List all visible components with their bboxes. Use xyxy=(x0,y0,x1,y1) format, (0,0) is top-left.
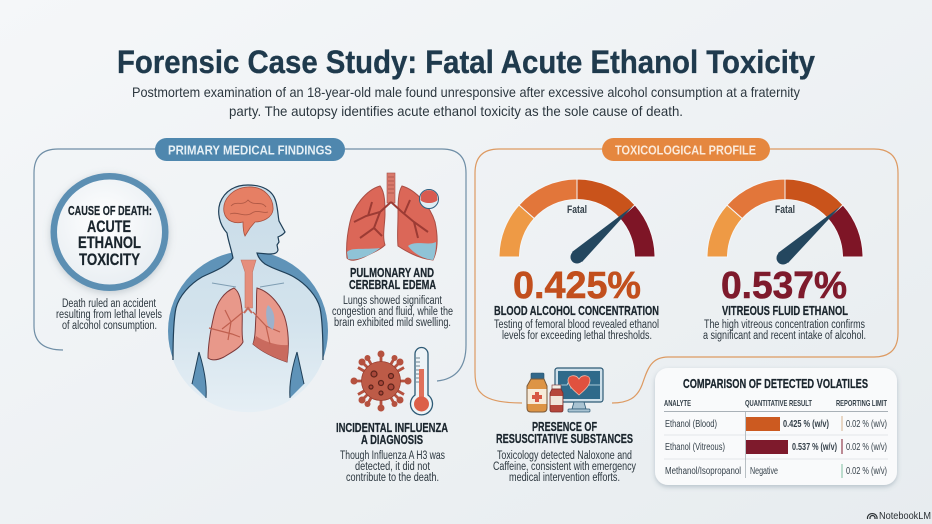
cause of death description: of alcohol consumption. xyxy=(62,320,157,332)
table row: methanol isopropanol: Negative xyxy=(750,466,778,477)
pulmonary edema text: Lungs showed significant xyxy=(343,295,443,307)
blood alcohol figures and text xyxy=(494,265,659,342)
body outline xyxy=(173,185,323,360)
arm gap shadows xyxy=(192,352,304,398)
panel: primary medical findings xyxy=(34,138,466,484)
vitreous fluid figures and text: VITREOUS FLUID ETHANOL xyxy=(722,303,848,318)
cause of death description: Death ruled an accident xyxy=(62,298,157,310)
resuscitative substances text: Caffeine, consistent with emergency xyxy=(493,461,636,473)
subtitle: party. The autopsy identifies acute ethanol toxicity as the sole cause of death. xyxy=(229,103,683,119)
subtitle xyxy=(132,84,800,119)
heading: toxicological profile xyxy=(602,138,770,161)
heading: primary medical findings xyxy=(155,138,345,161)
human body illustration xyxy=(168,185,328,412)
table row: ethanol blood: 0.02 % (w/v) xyxy=(846,419,887,430)
virus icon xyxy=(350,350,412,412)
table column headers xyxy=(664,398,888,408)
table row: methanol isopropanol xyxy=(665,464,887,478)
body fill xyxy=(173,185,323,412)
table column headers: REPORTING LIMIT xyxy=(836,398,888,408)
cause of death badge: TOXICITY xyxy=(79,251,140,269)
vitreous fluid figures and text: 0.537% xyxy=(721,265,847,307)
resuscitative substances text: Toxicology detected Naloxone and xyxy=(497,450,632,462)
gauge: vitreous fluid: Fatal xyxy=(775,204,795,216)
title: Forensic Case Study: Fatal Acute Ethanol Toxicity xyxy=(117,44,815,80)
table column headers: ANALYTE xyxy=(664,398,691,408)
resuscitative substances text: medical intervention efforts. xyxy=(509,472,620,484)
table column headers: QUANTITATIVE RESULT xyxy=(745,398,813,408)
influenza text: Though Influenza A H3 was xyxy=(340,450,445,462)
comparison table card xyxy=(655,368,897,485)
gauge: blood alcohol xyxy=(499,179,655,264)
blood alcohol figures and text: BLOOD ALCOHOL CONCENTRATION xyxy=(494,303,659,318)
pulmonary edema text xyxy=(332,265,453,329)
blood alcohol figures and text: Testing of femoral blood revealed ethanol xyxy=(494,319,659,331)
blood alcohol figures and text: levels for exceeding lethal thresholds. xyxy=(502,330,652,342)
resuscitative substances text xyxy=(493,419,636,484)
pulmonary edema text: CEREBRAL EDEMA xyxy=(349,277,436,292)
table row: ethanol blood xyxy=(665,416,887,431)
icon: medicine bottles and heart monitor xyxy=(527,368,603,412)
gauge: vitreous fluid xyxy=(707,179,863,264)
resuscitative substances text: PRESENCE OF xyxy=(532,419,597,434)
pulmonary edema text: brain exhibited mild swelling. xyxy=(334,317,451,329)
cause of death badge xyxy=(50,173,168,291)
heading: primary medical findings: PRIMARY MEDICAL FINDINGS xyxy=(168,142,332,158)
influenza text: contribute to the death. xyxy=(346,472,439,484)
influenza text: detected, it did not xyxy=(355,461,431,473)
pulmonary edema text: PULMONARY AND xyxy=(350,265,434,280)
cause of death badge: ACUTE xyxy=(87,218,131,236)
figure brain xyxy=(224,187,273,236)
vitreous fluid figures and text xyxy=(703,265,866,342)
cause of death badge: CAUSE OF DEATH: xyxy=(68,203,152,218)
resuscitative substances text: RESUSCITATIVE SUBSTANCES xyxy=(496,431,633,446)
table row: ethanol vitreous: 0.02 % (w/v) xyxy=(846,442,887,453)
panel: toxicological profile xyxy=(475,138,898,484)
table row: ethanol blood: 0.425 % (w/v) xyxy=(783,419,829,430)
gauge: blood alcohol: Fatal xyxy=(567,204,587,216)
thermometer icon xyxy=(411,348,433,415)
pulmonary edema text: congestion and fluid, while the xyxy=(332,306,453,318)
cause of death badge: ETHANOL xyxy=(78,234,141,252)
heading: toxicological profile: TOXICOLOGICAL PROFILE xyxy=(615,142,756,158)
blood alcohol figures and text: 0.425% xyxy=(513,265,641,307)
cause of death description xyxy=(56,298,162,332)
cause of death description: resulting from lethal levels xyxy=(56,309,162,321)
table row: ethanol vitreous xyxy=(665,439,887,454)
table row: ethanol blood: Ethanol (Blood) xyxy=(665,419,717,430)
vitreous fluid figures and text: The high vitreous concentration confirms xyxy=(704,319,865,331)
pulmonary edema lungs icon xyxy=(347,173,438,260)
trachea xyxy=(241,260,256,308)
table row: methanol isopropanol: 0.02 % (w/v) xyxy=(846,466,887,477)
influenza text: A DIAGNOSIS xyxy=(361,432,423,447)
influenza text xyxy=(336,420,448,484)
table row: ethanol vitreous: Ethanol (Vitreous) xyxy=(665,442,725,453)
table row: ethanol vitreous: 0.537 % (w/v) xyxy=(792,442,837,453)
influenza text: INCIDENTAL INFLUENZA xyxy=(336,420,448,435)
figure lungs xyxy=(208,288,243,360)
subtitle: Postmortem examination of an 18-year-old male found unresponsive after excessive alcohol consumption at a fraternity xyxy=(132,84,800,100)
magnified tissue xyxy=(420,190,438,208)
vitreous fluid figures and text: a significant and recent intake of alcohol. xyxy=(703,330,866,342)
table row: methanol isopropanol: Methanol/Isopropanol xyxy=(665,466,741,477)
